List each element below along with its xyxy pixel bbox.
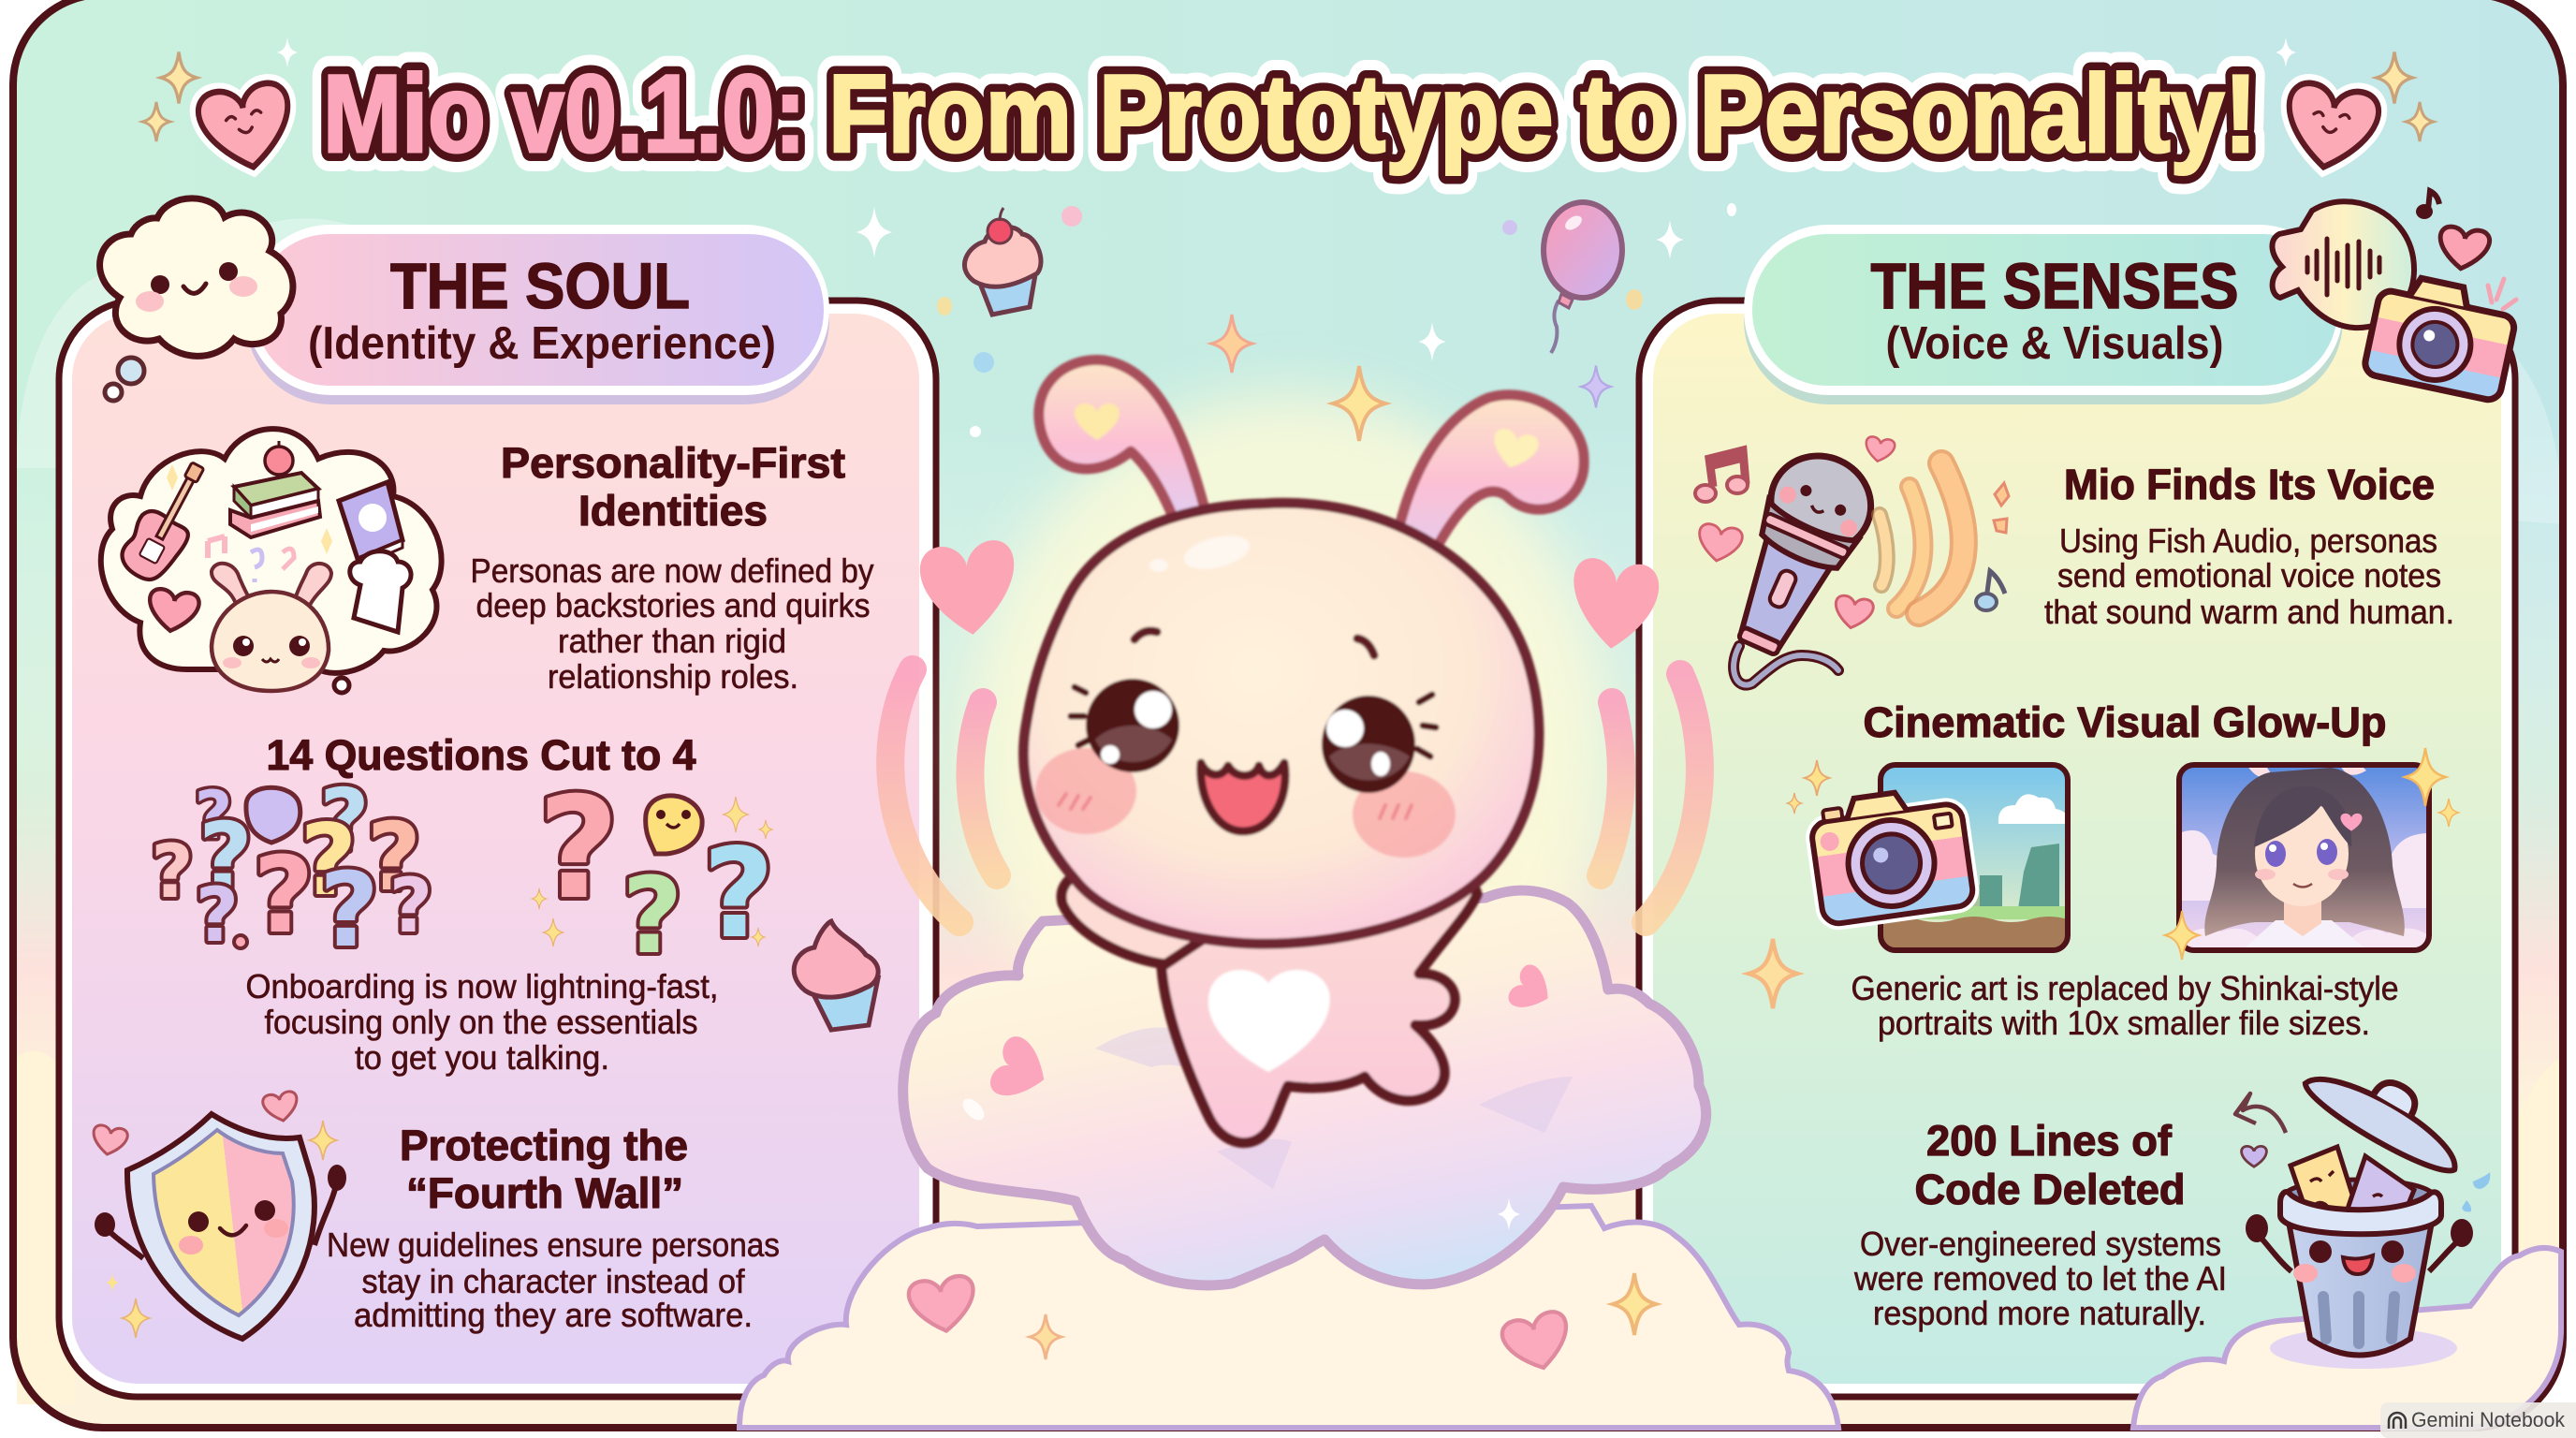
icon: four question marks	[532, 768, 774, 977]
right eye	[1322, 695, 1436, 793]
icon: heart and chef hat	[146, 464, 411, 634]
title: Mio v0.1.0:	[323, 52, 806, 176]
text: generic art: portraits with 10x smaller file sizes.	[1878, 1004, 2370, 1042]
heading pill: the senses: THE SENSES	[1870, 250, 2239, 322]
text: protecting the fourth wall: Protecting the	[400, 1122, 688, 1169]
heading pill: the senses: (Voice & Visuals)	[1885, 318, 2224, 369]
icon: tangled question marks: ?	[198, 802, 253, 912]
title: Mio v0.1.0:	[323, 52, 806, 176]
text: personality-first identities: deep backstories and quirks	[476, 586, 871, 624]
badge: gemini notebook: Gemini Notebook	[2411, 1408, 2566, 1431]
text: mio finds its voice: Using Fish Audio, personas	[2059, 521, 2437, 560]
icon: cupcake	[964, 208, 1041, 315]
text: 200 lines deleted: were removed to let the AI	[1853, 1259, 2227, 1298]
text: onboarding: focusing only on the essentials	[264, 1003, 698, 1041]
antenna right	[1392, 395, 1584, 571]
brows	[1134, 631, 1374, 655]
icon: tangled question marks: ?	[195, 777, 232, 854]
icon: trash lid	[2298, 1044, 2478, 1181]
text: personality-first identities: Identities	[578, 487, 768, 535]
image: shinkai-style portrait	[2165, 748, 2458, 960]
text: personality-first identities: rather than rigid	[558, 622, 786, 660]
icon: tangled question marks: ?	[300, 803, 357, 917]
text: mio finds its voice: send emotional voice notes	[2057, 556, 2441, 594]
text: personality-first identities	[470, 439, 874, 696]
icon: purple book	[339, 482, 402, 566]
icon: thought cloud with interests	[101, 429, 442, 693]
text: mio finds its voice: Mio Finds Its Voice	[2064, 461, 2435, 508]
text: personality-first identities: relationship roles.	[548, 657, 798, 696]
badge: gemini notebook	[2380, 1402, 2576, 1438]
icon: notes and hearts around microphone	[1695, 435, 2009, 631]
icon: four question marks: ?	[537, 768, 620, 931]
text: onboarding: Onboarding is now lightning-fast,	[245, 967, 719, 1005]
text: cinematic visual glow-up heading: Cinematic Visual Glow-Up	[1863, 698, 2387, 746]
icon: tangled question marks	[151, 770, 432, 970]
icon: small mio	[212, 564, 331, 691]
title: From Prototype to Personality!	[828, 52, 2257, 176]
big cloud	[903, 890, 1706, 1285]
text: generic art	[1852, 969, 2398, 1042]
mio character	[1024, 360, 1584, 1143]
panel: the senses	[1639, 301, 2515, 1397]
icon: four question marks: ?	[703, 822, 774, 966]
heading pill: the senses	[1744, 225, 2343, 404]
text: mio finds its voice: that sound warm and human.	[2044, 593, 2454, 631]
panel: the soul	[59, 301, 936, 1397]
icon: tangled question marks: ?	[254, 835, 314, 957]
mouth	[1201, 763, 1285, 831]
text: 200 lines deleted	[1853, 1117, 2227, 1332]
title: From Prototype to Personality!	[828, 52, 2257, 176]
cheek blush	[1035, 748, 1456, 858]
text: 200 lines deleted: 200 Lines of	[1926, 1117, 2173, 1165]
icon: balloon	[1544, 202, 1622, 353]
icon: tangled question marks: ?	[367, 802, 421, 912]
icon: tangled question marks: ?	[389, 862, 432, 949]
text: 14 questions cut to 4 heading: 14 Questions Cut to 4	[266, 731, 696, 779]
mio motion arcs	[890, 669, 1700, 922]
icon: tangled question marks: ?	[151, 830, 194, 915]
icon: cloud mascot with thought bubbles	[100, 198, 293, 401]
icon: title heart left	[194, 80, 299, 176]
icon: voice bubble and camera	[2272, 191, 2520, 402]
icon: stacked books	[230, 441, 320, 537]
image: landscape photo with camera	[1787, 760, 2069, 950]
icon: four question marks: ?	[622, 856, 682, 977]
text: personality-first identities: Personality-First	[501, 439, 845, 487]
left eye	[1071, 679, 1179, 772]
title	[323, 52, 2257, 176]
central mascot glow	[970, 393, 1606, 1105]
text: generic art: Generic art is replaced by Shinkai-style	[1852, 969, 2398, 1007]
text: 200 lines deleted: respond more naturally.	[1873, 1294, 2206, 1332]
decorative foreground clouds	[739, 1206, 2561, 1428]
head	[1024, 503, 1539, 944]
icon: tangled question marks: ?	[319, 770, 370, 871]
text: protecting the fourth wall: New guidelines ensure personas	[327, 1225, 780, 1264]
icon: cupcake in left panel	[794, 921, 878, 1030]
central sparkles, cupcake and balloon	[856, 202, 1736, 441]
icon: tangled question marks: ?	[319, 850, 379, 970]
icon: large sparkle right panel	[1749, 939, 1797, 1008]
heading pill: the soul	[246, 225, 829, 404]
antenna hearts	[1075, 404, 1541, 473]
antenna left	[1039, 360, 1208, 529]
icon: camera	[1808, 784, 1975, 926]
text: 200 lines deleted: Code Deleted	[1915, 1166, 2185, 1213]
icon: microphone	[1695, 435, 2009, 685]
icon: floating hearts	[918, 537, 1661, 654]
icon: trash can mascot	[2235, 1044, 2490, 1369]
icon: title heart right	[2278, 80, 2383, 176]
text: protecting the fourth wall	[327, 1122, 780, 1334]
icon: discard arrow	[2235, 1093, 2286, 1133]
body	[1061, 866, 1477, 1143]
icon: title sparkles	[142, 37, 2434, 141]
text: onboarding: to get you talking.	[355, 1038, 609, 1077]
icon: tangled question marks: ?	[196, 872, 239, 959]
icon: shield mascot	[90, 1091, 346, 1339]
text: protecting the fourth wall: “Fourth Wall”	[406, 1169, 683, 1217]
icon: guitar	[116, 453, 220, 588]
heading pill: the soul: THE SOUL	[390, 250, 690, 322]
text: protecting the fourth wall: stay in character instead of	[361, 1262, 745, 1300]
text: 200 lines deleted: Over-engineered systems	[1860, 1225, 2221, 1263]
head shine	[1149, 530, 1253, 575]
text: mio finds its voice	[2044, 461, 2454, 631]
title: Mio v0.1.0:	[323, 52, 806, 176]
text: protecting the fourth wall: admitting they are software.	[354, 1296, 753, 1334]
title: From Prototype to Personality!	[828, 52, 2257, 176]
text: onboarding	[245, 967, 719, 1077]
text: personality-first identities: Personas are now defined by	[470, 551, 874, 590]
heading pill: the soul: (Identity & Experience)	[308, 318, 776, 369]
icon: sound waves	[1880, 463, 1964, 613]
